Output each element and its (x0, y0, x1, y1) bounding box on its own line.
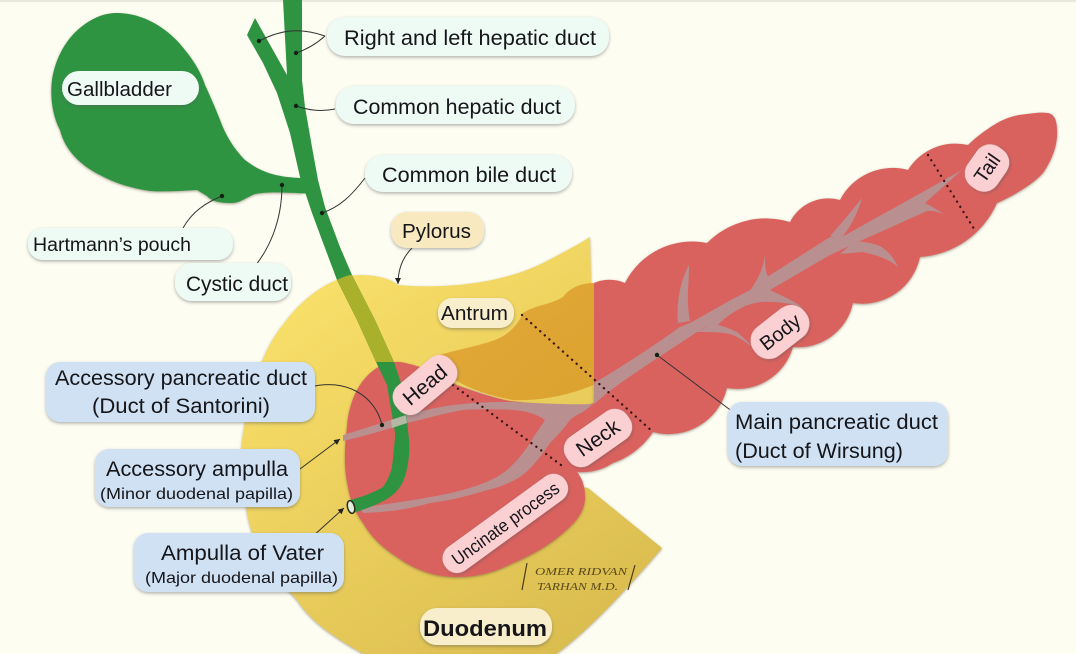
label: duodenum (420, 608, 552, 645)
pancreas (345, 113, 1057, 577)
bile duct system (247, 0, 409, 513)
label: cystic duct (175, 263, 291, 301)
label: main pancreatic duct: (Duct of Wirsung) (735, 440, 903, 463)
label: pylorus (391, 212, 484, 248)
label: gallbladder (62, 71, 199, 105)
label: body (744, 298, 816, 366)
ampulla of Vater opening (346, 500, 356, 514)
pancreatic duct system (343, 170, 962, 513)
label: cystic duct: Cystic duct (186, 273, 288, 296)
bile duct under stomach (337, 275, 394, 362)
label: accessory ampulla: Accessory ampulla (106, 458, 288, 481)
label: head: Head (399, 360, 452, 410)
label: pylorus: Pylorus (402, 221, 471, 243)
gallbladder (51, 13, 303, 203)
label: common bile duct: Common bile duct (382, 164, 556, 187)
accessory duct crossing (391, 415, 407, 428)
label: head (386, 349, 464, 421)
label: uncinate process: Uncinate process (448, 478, 563, 570)
label: tail: Tail (970, 150, 1005, 187)
label: right and left hepatic duct: Right and left hepatic duct (344, 27, 596, 50)
label: tail (958, 138, 1016, 198)
main pancreatic duct (594, 170, 962, 404)
label: ampulla of Vater (134, 533, 344, 592)
signature (522, 563, 635, 593)
label: accessory pancreatic duct: (Duct of Santorini) (92, 395, 270, 418)
accessory duct and fork (343, 393, 607, 513)
label: common bile duct (365, 155, 572, 192)
label: main pancreatic duct: Main pancreatic duct (735, 411, 938, 434)
stomach and duodenum (241, 237, 662, 654)
label: ampulla of Vater: Ampulla of Vater (161, 542, 324, 565)
label: neck (558, 403, 638, 473)
signature: OMER RIDVAN (535, 567, 629, 578)
label: neck: Neck (572, 415, 625, 462)
label: antrum: Antrum (441, 303, 508, 325)
label: accessory pancreatic duct (46, 362, 315, 422)
label: ampulla of Vater: (Major duodenal papilla) (145, 570, 338, 587)
label: duodenum: Duodenum (423, 616, 547, 641)
label: common hepatic duct (336, 86, 575, 124)
signature: TARHAN M.D. (537, 582, 618, 593)
dotted division lines (422, 155, 976, 468)
leader dots (220, 39, 659, 427)
label: main pancreatic duct (728, 402, 948, 466)
label: accessory ampulla: (Minor duodenal papilla) (100, 486, 293, 503)
label: Hartmann's pouch (28, 228, 233, 260)
label: antrum (438, 298, 514, 328)
label: right and left hepatic duct (327, 17, 609, 56)
label: Hartmann's pouch: Hartmann’s pouch (33, 235, 191, 256)
antrum overlap (440, 283, 594, 400)
label: gallbladder: Gallbladder (67, 79, 172, 101)
label: accessory ampulla (95, 449, 300, 507)
label: body: Body (756, 310, 805, 355)
label: accessory pancreatic duct: Accessory pancreatic duct (55, 367, 307, 390)
label: common hepatic duct: Common hepatic duct (353, 96, 561, 119)
leader lines (183, 31, 737, 537)
